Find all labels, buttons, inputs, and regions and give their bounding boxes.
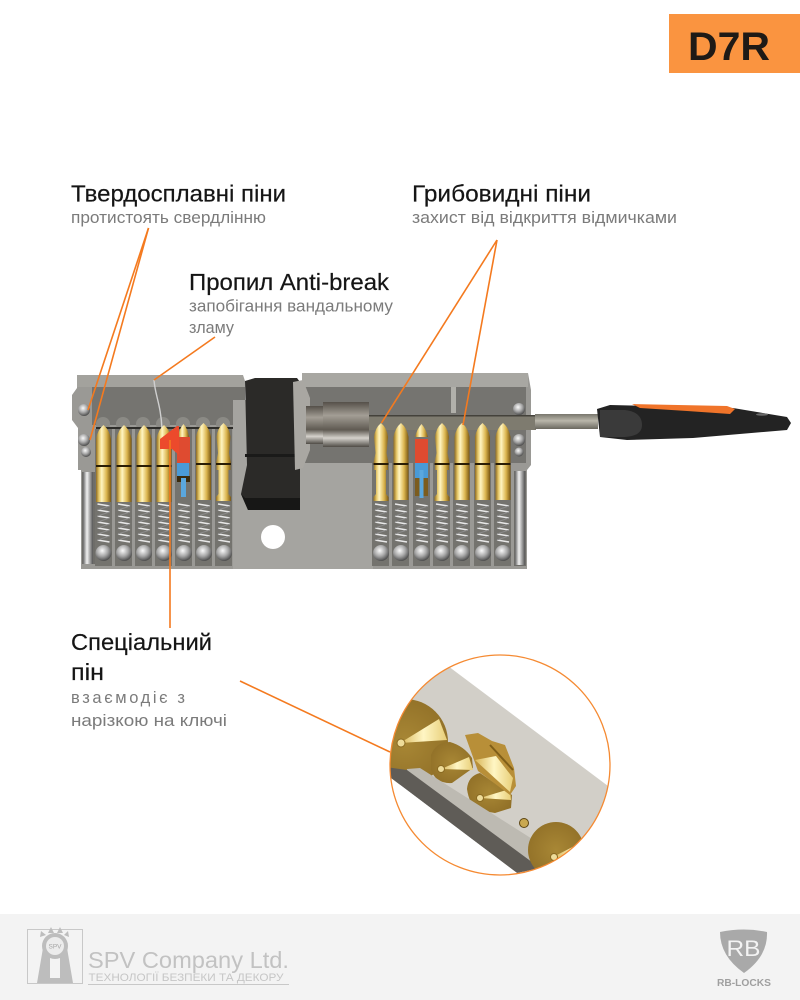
leader lines: mushroom pins xyxy=(382,240,497,425)
label: carbide pins: протистоять свердлінню xyxy=(71,209,266,227)
badge: D7R: D7R xyxy=(688,25,770,69)
raised special cone xyxy=(465,733,516,795)
label: special pin: пін xyxy=(71,659,104,685)
label: special pin xyxy=(71,629,227,730)
badge: D7R xyxy=(669,14,800,73)
label: mushroom pins xyxy=(412,180,677,227)
dimple 4 xyxy=(528,822,582,868)
logo: SPV Company: ТЕХНОЛОГІЇ БЕЗПЕКИ ТА ДЕКОРУ xyxy=(88,972,285,984)
logo: SPV Company: SPV xyxy=(48,944,62,950)
brushed lower key edge xyxy=(407,768,530,860)
screws xyxy=(78,403,525,457)
black cam xyxy=(241,378,300,510)
right cylinder body xyxy=(302,373,531,569)
mounting hole xyxy=(261,525,285,549)
cam flange xyxy=(293,380,310,470)
logo: RB-Locks xyxy=(717,930,771,989)
logo: SPV Company xyxy=(28,927,289,985)
key steel surface xyxy=(412,668,608,872)
leader lines: carbide pins xyxy=(88,228,148,440)
springs xyxy=(96,504,511,561)
leader line: special pin xyxy=(169,440,171,628)
label: carbide pins: Твердосплавні піни xyxy=(71,180,286,206)
label: special pin: взаємодіє з xyxy=(71,689,185,707)
central cylinder xyxy=(306,402,369,447)
leader line: anti-break xyxy=(154,337,215,380)
dimple 1 xyxy=(390,700,448,784)
label: anti-break cut: зламу xyxy=(189,319,235,337)
label: anti-break cut xyxy=(189,269,394,337)
logo: SPV Company: SPV Company Ltd. xyxy=(88,947,289,973)
label: special pin: нарізкою на ключі xyxy=(71,712,227,730)
label: anti-break cut: запобігання вандальному xyxy=(189,298,394,316)
key blade and shaft xyxy=(368,414,598,430)
label: carbide pins xyxy=(71,180,286,227)
label: mushroom pins: захист від відкриття відмичками xyxy=(412,209,677,227)
logo: RB-Locks: RB xyxy=(726,936,760,961)
key handle xyxy=(597,404,791,440)
dimple 2 xyxy=(431,742,473,783)
special pin left xyxy=(160,424,190,497)
label: special pin: Спеціальний xyxy=(71,629,212,655)
white area below key xyxy=(391,778,517,873)
leader line: detail inset xyxy=(240,681,390,752)
left cylinder body xyxy=(72,375,245,569)
logo: RB-Locks: RB-LOCKS xyxy=(717,978,771,989)
label: anti-break cut: Пропил Anti-break xyxy=(189,269,390,295)
label: mushroom pins: Грибовидні піни xyxy=(412,180,591,206)
anti-break cut xyxy=(154,380,162,429)
special pin right xyxy=(415,424,428,498)
footer band xyxy=(0,914,800,1000)
brass pins xyxy=(96,423,510,502)
small stud xyxy=(520,818,528,828)
dark key side xyxy=(385,767,540,873)
cylinder lock cutaway xyxy=(72,373,791,569)
dimple 3 xyxy=(467,773,512,813)
detail inset: key close-up xyxy=(389,654,611,876)
central plate xyxy=(233,400,375,569)
